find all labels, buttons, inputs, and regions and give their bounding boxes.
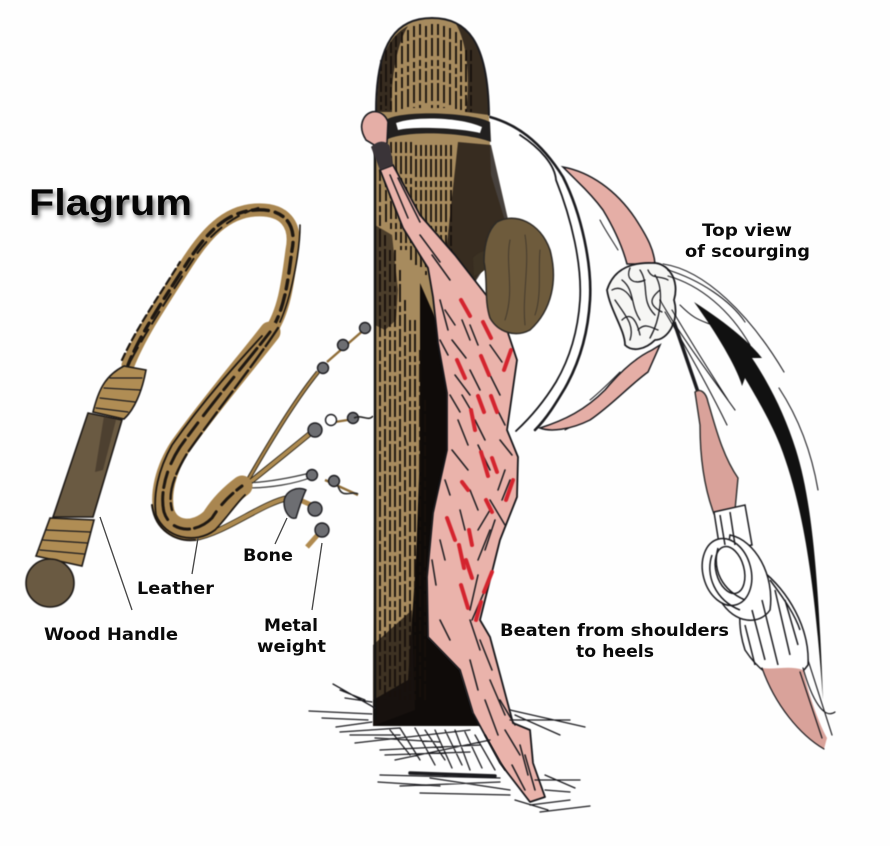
body and raised arm: [380, 165, 545, 802]
cloth bundle: [607, 263, 676, 349]
whip handle: [674, 322, 698, 392]
upper arm in top view: [563, 167, 655, 264]
loin cloth and pleats: [695, 505, 808, 679]
whip motion lines: [660, 264, 818, 490]
rope ring around post: [386, 113, 491, 142]
label: bone with leader line: Bone: [243, 546, 293, 565]
hair: [484, 218, 553, 334]
braided upper lash: [122, 207, 300, 540]
label: wood handle with leader line: [44, 517, 178, 644]
label: top view of scourging: [685, 221, 810, 261]
wood grain: [380, 24, 471, 700]
striker leg: [762, 668, 827, 749]
label: metal weight with leader line: [257, 543, 326, 656]
fan of tails: [244, 372, 318, 487]
top view of scourging: white circular body outline: [490, 117, 676, 431]
handle wood: [53, 413, 122, 517]
label: top view of scourging: of scourging: [685, 242, 810, 261]
label: metal weight with leader line: Metal: [264, 616, 318, 635]
label: leather with leader line: [137, 538, 215, 598]
label: bone with leader line: [243, 518, 293, 565]
beads: [284, 322, 370, 537]
hand on ring: [362, 112, 388, 146]
flagrum whip: [26, 207, 373, 607]
label: wood handle with leader line: Wood Handle: [44, 625, 178, 644]
label: beaten from shoulders to heels: [500, 621, 729, 661]
wounds: [447, 300, 513, 620]
dark wood shading: [377, 24, 510, 290]
top view: striker with flagrum: [660, 264, 835, 749]
handle knob: [26, 559, 74, 607]
post: [373, 18, 510, 726]
near arm behind hair: [484, 226, 512, 266]
label: beaten from shoulders to heels: to heels: [576, 642, 654, 661]
anatomy hatching: [390, 175, 535, 790]
dark hand at hair: [473, 251, 497, 276]
forearm: [695, 390, 738, 514]
title: Flagrum: [29, 182, 192, 223]
label: top view of scourging: Top view: [702, 221, 792, 240]
label: metal weight with leader line: weight: [257, 637, 326, 656]
label: leather with leader line: Leather: [137, 579, 215, 598]
handle lower binding: [36, 518, 94, 566]
flagellated figure: [362, 112, 553, 802]
label: beaten from shoulders to heels: Beaten from shoulders: [500, 621, 729, 640]
lower arm in top view: [540, 345, 660, 430]
ground scratches: [309, 684, 590, 812]
handle upper binding: [93, 366, 146, 419]
motion arrow: [694, 302, 823, 700]
